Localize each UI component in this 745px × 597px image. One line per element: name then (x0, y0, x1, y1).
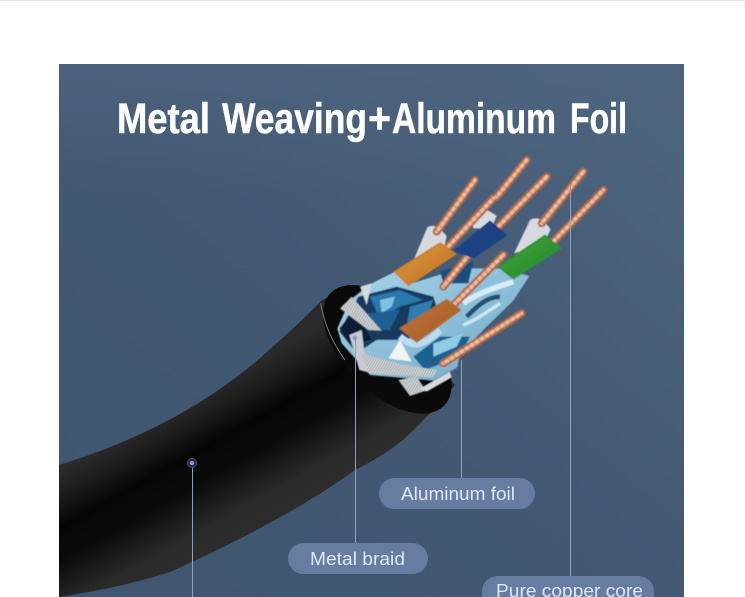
metal braid strips (340, 283, 452, 396)
label: metal braid: Metal braid (310, 549, 405, 569)
white inner sleeves (413, 209, 551, 310)
title: Weaving (222, 95, 367, 143)
cable end and exposed conductors (300, 160, 603, 437)
label: pure copper core (482, 576, 654, 597)
title: Foil (570, 95, 627, 143)
jacket rim highlight (321, 303, 345, 360)
callout lines (192, 185, 570, 597)
cable jacket (59, 287, 455, 597)
insulated sleeves (395, 222, 560, 342)
title: + (368, 95, 391, 143)
callout dot: jacket (188, 458, 196, 468)
copper conductors (437, 160, 603, 363)
title: Metal (117, 95, 210, 143)
title: Aluminum (392, 95, 556, 143)
page top rule (0, 0, 745, 1)
label: aluminum foil (379, 478, 535, 509)
panel: background (59, 64, 684, 597)
cable end face (300, 262, 475, 437)
aluminum foil bundle (337, 262, 529, 381)
label: aluminum foil: Aluminum foil (401, 484, 515, 504)
label: metal braid (288, 543, 428, 574)
callout dot: metal braid (352, 336, 358, 340)
exposed bundle (337, 160, 603, 396)
